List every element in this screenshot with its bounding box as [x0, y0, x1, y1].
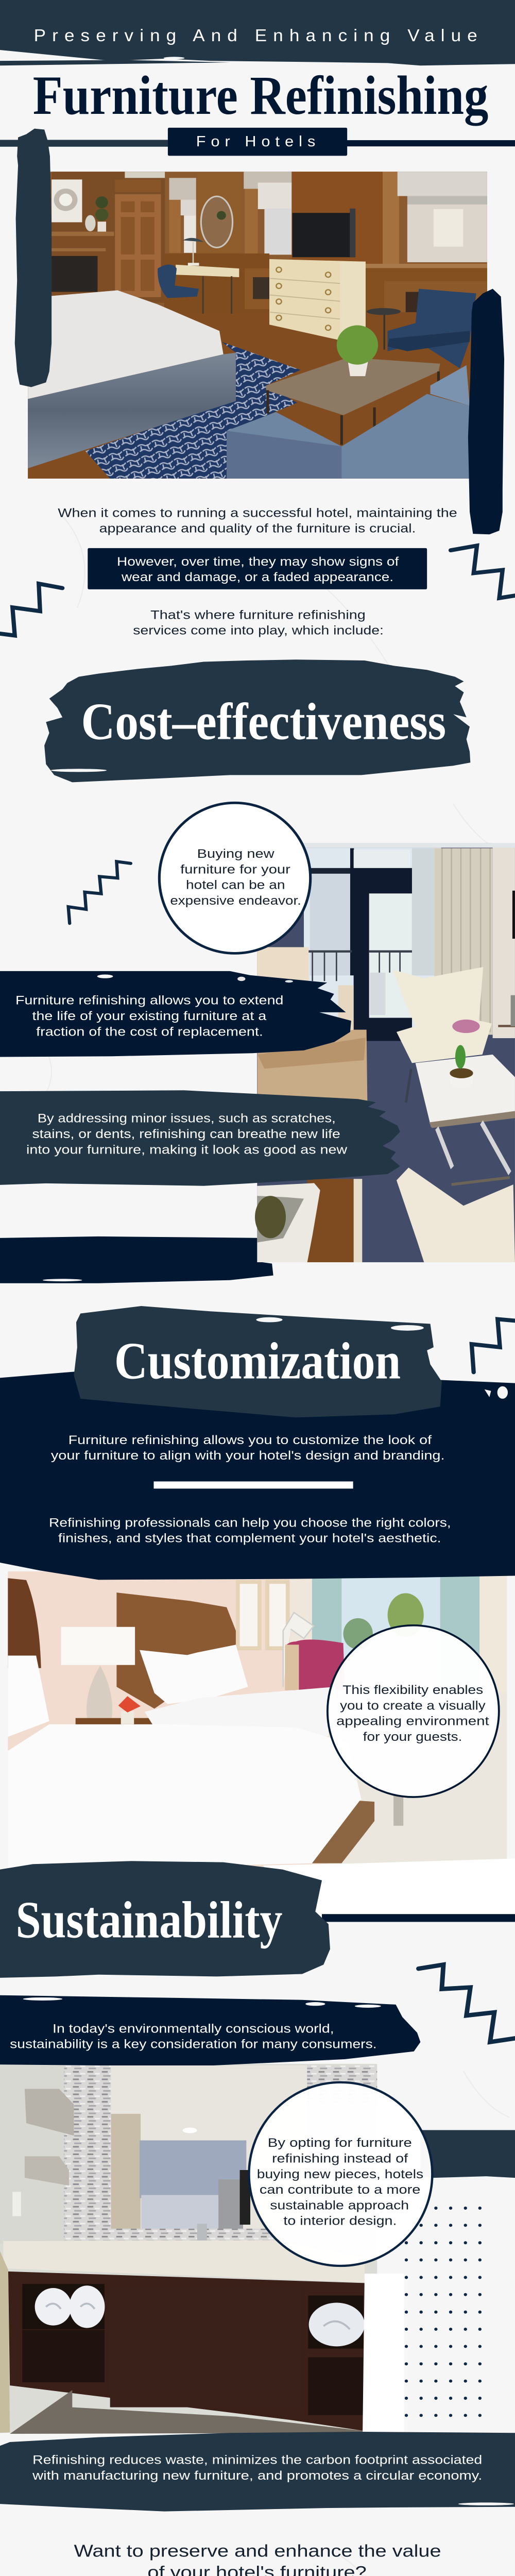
lead-in text: services come into play, which include: [133, 623, 384, 638]
circle callout: expensive endeavor: hotel can be an [186, 878, 285, 892]
teal brush: minor issues: stains, or dents, refinishing can breathe new life [32, 1127, 340, 1141]
navy brush: environmentally conscious [0, 1995, 420, 2065]
call to action text [74, 2541, 441, 2576]
circle callout: sustainable approach [249, 2082, 432, 2266]
teal accent block [420, 2130, 515, 2178]
call to action text: Want to preserve and enhance the value [74, 2541, 441, 2561]
heading: cost-effectiveness [44, 659, 470, 782]
teal brush: minor issues [0, 1090, 400, 1186]
customization paragraph two [49, 1516, 451, 1545]
white brush panel [363, 2274, 404, 2432]
lead-in text: That's where furniture refinishing [150, 608, 366, 622]
circle callout: expensive endeavor: Buying new [197, 847, 275, 861]
zigzag small [68, 861, 131, 923]
customization paragraph one: your furniture to align with your hotel's design and branding. [51, 1449, 445, 1463]
circle callout: sustainable approach: refinishing instead of [272, 2151, 408, 2165]
teal brush: reduces waste [0, 2432, 515, 2512]
navy brush: extend the life: fraction of the cost of replacement. [36, 1025, 263, 1039]
section: customization detail [49, 1481, 515, 1922]
section: sustainability [0, 1861, 330, 1978]
right brush stroke [468, 289, 504, 534]
heading: sustainability: Sustainability [16, 1891, 283, 1949]
circle callout: sustainable approach: to interior design. [283, 2214, 397, 2228]
navy brush: extend the life: the life of your existing furniture at a [32, 1009, 266, 1023]
highlight box: wear and damage [88, 548, 427, 589]
navy brush: environmentally conscious: sustainability is a key consideration for many consumers. [10, 2037, 377, 2052]
circle callout: flexibility [328, 1625, 499, 1797]
circle callout: sustainable approach: By opting for furniture [268, 2136, 412, 2150]
circle callout: sustainable approach: buying new pieces, hotels [257, 2167, 423, 2181]
section: introduction [0, 506, 515, 923]
circle callout: flexibility: for your guests. [363, 1730, 462, 1744]
white divider bar [153, 1481, 353, 1488]
section: footer [0, 2432, 515, 2576]
bedroom photo [8, 1571, 507, 1871]
teal brush: minor issues: into your furniture, making it look as good as new [26, 1143, 348, 1157]
navy brush: extend the life [0, 971, 351, 1057]
white brush with navy line [263, 1858, 515, 1922]
section: header and hero [0, 0, 515, 534]
left brush stroke [15, 129, 52, 387]
navy brush: environmentally conscious: In today's environmentally conscious world, [53, 2022, 334, 2036]
section: cost-effectiveness points [0, 971, 400, 1186]
circle callout: sustainable approach: sustainable approach [270, 2198, 409, 2212]
heading: sustainability [0, 1861, 330, 1978]
heading: cost-effectiveness: Cost–effectiveness [81, 692, 446, 751]
customization paragraph one [51, 1433, 445, 1463]
zigzag right [451, 546, 515, 598]
teal brush: minor issues: By addressing minor issues, such as scratches, [38, 1111, 336, 1126]
heading: customization [74, 1306, 442, 1417]
section: customization [0, 1306, 515, 1580]
dot grid [405, 2207, 482, 2417]
navy background panel [0, 1371, 515, 1580]
header kicker text: Preserving And Enhancing Value [34, 26, 477, 45]
white flecks on navy panel [485, 1386, 508, 1399]
circle callout: flexibility: This flexibility enables [342, 1683, 483, 1697]
navy brush: extend the life: Furniture refinishing allows you to extend [15, 993, 283, 1008]
intro paragraph: When it comes to running a successful hotel, maintaining the [58, 506, 457, 520]
circle callout: expensive endeavor: expensive endeavor. [170, 893, 301, 908]
highlight box: wear and damage: However, over time, they may show signs of [117, 554, 399, 569]
subtitle bar: For Hotels [196, 133, 315, 150]
bathroom photo [0, 2064, 377, 2434]
circle callout: sustainable approach: can contribute to a more [260, 2183, 420, 2197]
zigzag left [0, 584, 62, 636]
closing brush behind lobby photo [0, 1236, 273, 1283]
heading: customization: Customization [114, 1332, 401, 1390]
circle callout: expensive endeavor: furniture for your [180, 862, 290, 876]
circle callout: flexibility: you to create a visually [340, 1699, 486, 1713]
lobby photo [255, 843, 515, 1262]
circle callout: flexibility: appealing environment [336, 1714, 489, 1728]
teal brush: reduces waste: Refinishing reduces waste, minimizes the carbon footprint associated [32, 2452, 482, 2467]
intro paragraph: appearance and quality of the furniture is crucial. [99, 521, 416, 535]
hero photo: hotel room [28, 172, 487, 479]
zigzag sustainability [419, 1964, 515, 2042]
lead-in text [133, 608, 384, 638]
intro paragraph [58, 506, 457, 535]
zigzag customization [472, 1319, 515, 1372]
circle callout: expensive endeavor [159, 803, 311, 953]
customization paragraph one: Furniture refinishing allows you to customize the look of [68, 1433, 432, 1447]
highlight box: wear and damage: wear and damage, or a faded appearance. [121, 570, 393, 584]
teal brush: reduces waste: with manufacturing new furniture, and promotes a circular economy. [32, 2468, 482, 2482]
header band [0, 0, 515, 65]
subtitle bar [0, 128, 515, 156]
customization paragraph two: finishes, and styles that complement your hotel's aesthetic. [58, 1531, 441, 1545]
customization paragraph two: Refinishing professionals can help you choose the right colors, [49, 1516, 451, 1530]
